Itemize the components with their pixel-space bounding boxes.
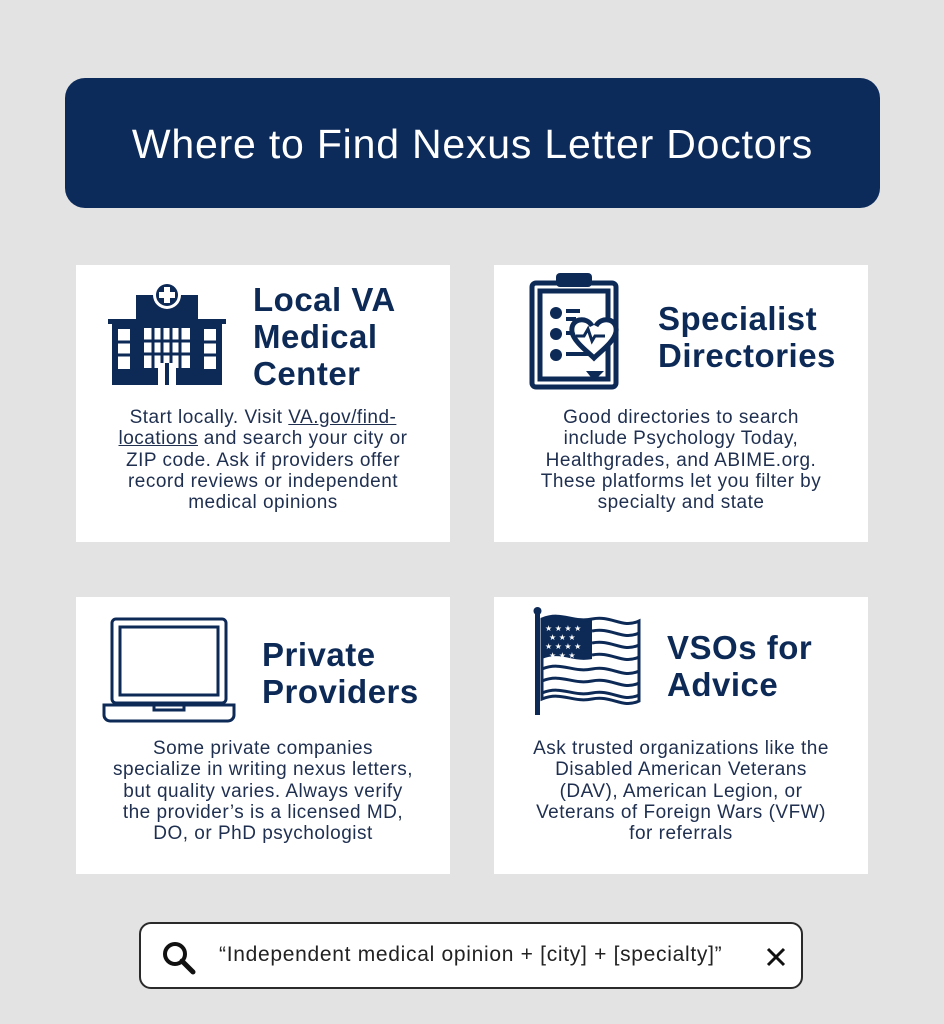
body text: DO, or PhD psychologist <box>153 823 373 844</box>
heading: Advice <box>667 666 778 703</box>
body text: specialize in writing nexus letters, <box>113 759 413 780</box>
body text: ZIP code. Ask if providers offer <box>126 450 400 471</box>
panel: specialist directories <box>494 265 868 542</box>
panel: private providers <box>76 597 450 874</box>
title bar <box>65 78 880 208</box>
body text: Good directories to search <box>563 407 799 428</box>
search text: “Independent medical opinion + [city] + [specialty]” <box>219 943 722 966</box>
heading: Private <box>262 636 376 673</box>
panel: VSOs for advice <box>494 597 868 874</box>
body text: Start locally. Visit VA.gov/find- <box>130 407 396 428</box>
body text <box>113 738 413 844</box>
heading <box>658 300 836 374</box>
icon: close <box>767 948 785 966</box>
body text: Healthgrades, and ABIME.org. <box>546 450 816 471</box>
heading: Local VA <box>253 281 396 318</box>
icon: flag: ★ ★ ★ ★ <box>545 624 581 633</box>
icon: magnifier <box>163 942 196 974</box>
icon: flag: ★ ★ ★ ★ <box>545 642 581 651</box>
body text: (DAV), American Legion, or <box>560 781 802 802</box>
heading: Providers <box>262 673 419 710</box>
body text: for referrals <box>629 823 733 844</box>
heading <box>667 629 812 703</box>
heading: Center <box>253 355 361 392</box>
body text: specialty and state <box>598 492 764 513</box>
heading: VSOs for <box>667 629 812 666</box>
icon: flag: ★ ★ ★ <box>549 651 576 660</box>
body text: record reviews or independent <box>128 471 398 492</box>
panel: local VA medical center <box>76 265 450 542</box>
icon: flag <box>534 607 640 715</box>
body text <box>541 407 821 513</box>
icon: clipboard with heart <box>530 273 619 390</box>
icon: laptop <box>102 618 236 722</box>
heading: Specialist <box>658 300 817 337</box>
heading: Medical <box>253 318 378 355</box>
icon: hospital <box>108 284 226 385</box>
icon: flag: ★ ★ ★ <box>549 633 576 642</box>
body text: These platforms let you filter by <box>541 471 821 492</box>
title bar: Where to Find Nexus Letter Doctors <box>132 121 813 167</box>
body text <box>533 738 829 844</box>
body text: the provider’s is a licensed MD, <box>123 802 403 823</box>
body text: include Psychology Today, <box>564 428 798 449</box>
heading <box>262 636 419 710</box>
body text: Some private companies <box>153 738 373 759</box>
body text: but quality varies. Always verify <box>123 781 403 802</box>
search bar <box>139 922 803 989</box>
body text: medical opinions <box>188 492 338 513</box>
body text: Disabled American Veterans <box>555 759 807 780</box>
body text: Veterans of Foreign Wars (VFW) <box>536 802 826 823</box>
body text: Ask trusted organizations like the <box>533 738 829 759</box>
body text <box>118 407 407 513</box>
heading <box>253 281 396 392</box>
heading: Directories <box>658 337 836 374</box>
body text: locations and search your city or <box>118 428 407 449</box>
